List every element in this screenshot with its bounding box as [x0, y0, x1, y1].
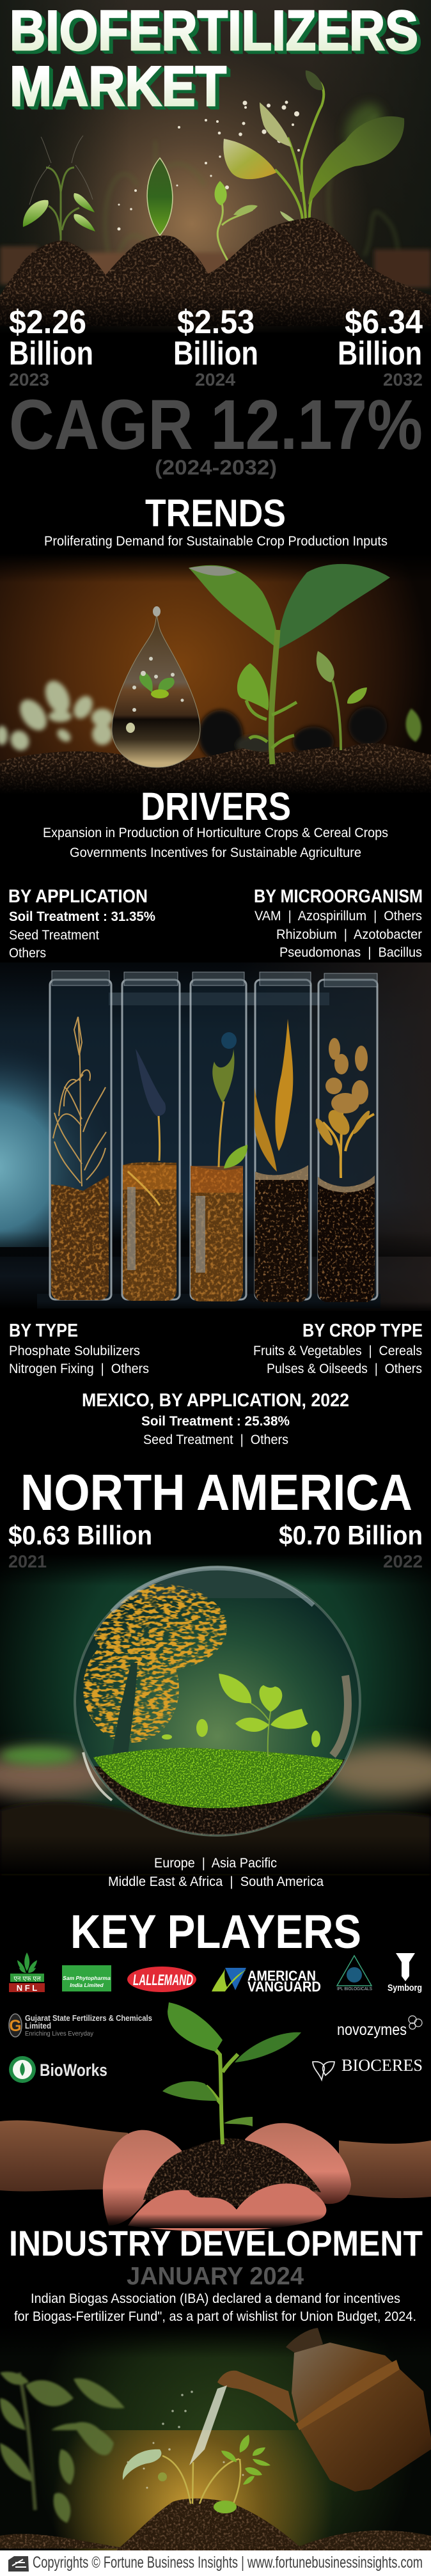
logo: NFL: N F L	[17, 1983, 37, 1993]
value: North America 2021: $0.63 Billion	[8, 1520, 152, 1550]
test tube three	[191, 972, 247, 1301]
logo: Gujarat State Fertilizers: Enriching Lives Everyday	[25, 2030, 94, 2038]
water stream	[127, 2385, 244, 2489]
text: trends description: Proliferating Demand for Sustainable Crop Production Inputs	[44, 533, 388, 549]
title	[10, 0, 418, 118]
test tube one	[50, 971, 111, 1300]
segment: Mexico by application	[82, 1390, 349, 1447]
panel: hero seedlings image	[0, 0, 431, 336]
market value 2023	[9, 304, 93, 389]
logo: NFL: एन एफ एल	[13, 1975, 41, 1983]
segment: by application: Soil Treatment : 31.35%	[9, 909, 155, 924]
segment: by application: Others	[9, 945, 46, 961]
rack bar	[109, 993, 329, 1005]
logo: Sam Phytopharma: Sam Phytopharma	[63, 1975, 111, 1981]
segment: by application: BY APPLICATION	[8, 886, 148, 907]
segment: by crop type	[253, 1321, 423, 1376]
market value 2024: Billion	[173, 335, 258, 372]
segment: by type: Phosphate Solubilizers	[9, 1343, 140, 1358]
segment: by microorganism: Rhizobium | Azotobacter	[276, 927, 422, 942]
text: drivers list: Governments Incentives for Sustainable Agriculture	[70, 845, 361, 860]
test tube five	[313, 973, 377, 1302]
logo: American Vanguard	[212, 1968, 321, 1995]
icon: seedling in hands	[162, 2002, 301, 2144]
market value 2032: 2032	[383, 370, 423, 389]
icon: seedling one	[23, 136, 95, 241]
logo: Symborg: Symborg	[388, 1983, 422, 1993]
value: North America 2022	[279, 1520, 423, 1571]
text: other regions: Europe | Asia Pacific	[154, 1855, 277, 1871]
heading: key players: KEY PLAYERS	[70, 1905, 361, 1958]
market value 2032	[338, 304, 423, 389]
icon: seedling two	[147, 158, 173, 235]
icon: plant inside globe	[162, 1674, 320, 1757]
value: North America 2021: 2021	[8, 1551, 47, 1571]
rack base	[37, 1294, 380, 1308]
market value 2032: $6.34	[345, 304, 423, 341]
market value 2024	[173, 304, 258, 389]
text: drivers list: Expansion in Production of Horticulture Crops & Cereal Crops	[43, 825, 388, 840]
icon: large plant	[223, 70, 404, 225]
segment: by type: Nitrogen Fixing | Others	[9, 1361, 149, 1376]
heading: drivers: DRIVERS	[141, 785, 291, 828]
logo: Sam Phytopharma	[62, 1965, 111, 1991]
logo: Gujarat State Fertilizers: Gujarat State Fertilizers & Chemicals	[25, 2013, 152, 2023]
title: MARKET	[10, 54, 226, 118]
text: development description: Indian Biogas Association (IBA) declared a demand for incentives	[31, 2291, 400, 2306]
heading: trends: TRENDS	[145, 492, 286, 535]
text: other regions	[108, 1855, 324, 1889]
panel: glass globe image	[0, 1554, 431, 1874]
segment: by microorganism: VAM | Azospirillum | Others	[255, 908, 422, 923]
footer: logo	[8, 2556, 29, 2572]
logo: Lallemand: LALLEMAND	[133, 1972, 193, 1989]
logo: Gujarat State Fertilizers: G	[9, 2017, 22, 2035]
panel: water drop and seedlings image	[0, 554, 431, 794]
date: January 2024: JANUARY 2024	[127, 2263, 304, 2290]
logo: BioWorks	[9, 2056, 107, 2083]
logo: Gujarat State Fertilizers: Limited	[25, 2021, 51, 2030]
logo: Bioceres: BIOCERES	[341, 2056, 423, 2075]
logo: Bioceres	[313, 2056, 423, 2080]
logo: Gujarat State Fertilizers	[9, 2013, 152, 2038]
market value 2023: $2.26	[9, 304, 86, 341]
icon: water drop	[112, 606, 200, 767]
soil mound	[116, 2499, 304, 2550]
segment: by application	[8, 886, 155, 961]
market value 2023: 2023	[9, 370, 49, 389]
logo: IPL Biologicals	[337, 1956, 372, 1991]
market value 2024: 2024	[195, 370, 235, 389]
logo: American Vanguard: AMERICAN	[247, 1968, 316, 1984]
panel: watering can image	[0, 2326, 431, 2551]
footer bar	[0, 2550, 431, 2576]
logo: Sam Phytopharma: India Limited	[70, 1982, 104, 1988]
logo: Lallemand	[127, 1967, 196, 1992]
icon: glowing seedling	[123, 2435, 270, 2513]
icon: watering can	[217, 2328, 431, 2492]
segment: Mexico by application: Soil Treatment : 25.38%	[141, 1413, 290, 1429]
segment: Mexico by application: Seed Treatment | Others	[143, 1432, 288, 1447]
logos: key players	[9, 1952, 423, 2083]
soil mounds	[0, 217, 431, 326]
segment: by type	[9, 1321, 149, 1376]
CAGR callout: (2024-2032)	[155, 456, 277, 479]
icon: globe	[74, 1566, 362, 1839]
test tube four	[255, 972, 311, 1302]
icon: large leafy plant	[189, 564, 390, 764]
test tube two	[122, 972, 180, 1301]
market value 2024: $2.53	[177, 304, 255, 341]
segment: Mexico by application: MEXICO, BY APPLICATION, 2022	[82, 1390, 349, 1411]
value: North America 2022: $0.70 Billion	[279, 1520, 423, 1550]
icon: seedling three	[214, 181, 258, 264]
text: drivers list	[43, 825, 388, 860]
logo: American Vanguard: VANGUARD	[247, 1979, 321, 1995]
logo: NFL	[9, 1952, 45, 1993]
value: North America 2021	[8, 1520, 152, 1571]
panel: test tubes image	[0, 962, 431, 1313]
logo: BioWorks: BioWorks	[40, 2061, 107, 2080]
text: development description	[14, 2291, 416, 2324]
panel: hands holding seedling image	[0, 2002, 431, 2231]
logo: Novozymes: novozymes	[337, 2021, 407, 2039]
segment: by type: BY TYPE	[9, 1321, 78, 1341]
value: North America 2022: 2022	[383, 1551, 423, 1571]
logo: Symborg	[388, 1953, 422, 1993]
market value 2023: Billion	[9, 335, 93, 372]
segment: by microorganism: Pseudomonas | Bacillus	[279, 945, 422, 960]
segment: by microorganism	[254, 886, 423, 960]
logo: IPL Biologicals: IPL BIOLOGICALS	[337, 1987, 372, 1991]
icon: small seedling	[317, 651, 421, 750]
icon: background plant	[0, 2372, 125, 2523]
segment: by application: Seed Treatment	[9, 927, 99, 943]
text: other regions: Middle East & Africa | South America	[108, 1874, 324, 1889]
